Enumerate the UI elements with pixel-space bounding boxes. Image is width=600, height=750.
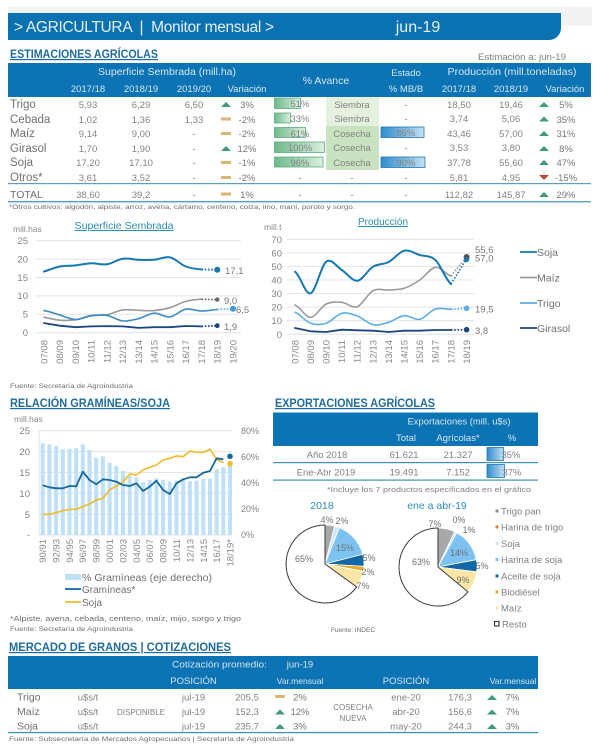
row: Maíz: 43,46	[447, 129, 471, 140]
pie chart: 2018: 4%	[320, 515, 334, 525]
chart: superficie sembrada: 1,9	[224, 322, 237, 333]
chart: relación gramíneas/soja: 60%	[241, 452, 259, 462]
chart: relación gramíneas/soja: 04/05	[132, 539, 143, 563]
table header: 2017/18	[71, 84, 105, 95]
row: Soja: Soja	[10, 157, 34, 169]
table: cotizaciones: u$s/t	[78, 722, 99, 732]
table: exportaciones: Año 2018	[307, 450, 347, 461]
header banner: jun-19	[395, 19, 440, 36]
chart: relación gramíneas/soja: 00/01	[105, 539, 116, 563]
header banner: > AGRICULTURA | Monitor mensual >	[14, 19, 274, 36]
legend: pie charts: Harina de trigo	[501, 522, 563, 534]
legend: producción	[520, 247, 570, 335]
table: estimaciones agrícolas	[8, 63, 591, 202]
chart: relación gramíneas/soja: 16/17	[212, 539, 223, 563]
table: cotizaciones: u$s/t	[78, 692, 99, 704]
table: cotizaciones: 205,5	[235, 692, 259, 704]
chart: producción: 18/19	[462, 340, 473, 364]
chart: relación gramíneas/soja: 96/97	[78, 539, 89, 563]
table: cotizaciones: Var.mensual	[277, 676, 323, 686]
row: Cebada: Siembra	[334, 114, 370, 125]
bars: % gramíneas	[41, 443, 232, 535]
table: cotizaciones: POSICIÓN	[383, 676, 429, 687]
table: cotizaciones: Maíz	[17, 706, 40, 718]
pie chart: 2018: 2%	[361, 567, 375, 577]
row: Cebada	[10, 113, 576, 126]
chart: relación gramíneas/soja: 40%	[241, 478, 259, 488]
table: exportaciones: 7.152	[446, 468, 470, 478]
chart: relación gramíneas/soja: 10	[19, 489, 30, 500]
table header: 2017/18	[442, 84, 476, 95]
legend: pie charts: Trigo pan	[501, 506, 541, 518]
row: Otros	[10, 172, 578, 184]
status background cells	[326, 97, 379, 170]
legend: pie charts: Aceite de soja	[501, 572, 561, 582]
pie chart: ene a abr-19: 1%	[462, 525, 476, 535]
chart: superficie sembrada: 15	[17, 273, 28, 284]
chart: producción: 20	[271, 302, 282, 314]
row: Soja: 37,78	[447, 158, 471, 169]
row: Girasol: 100%	[288, 143, 313, 154]
line: soja	[43, 449, 223, 514]
chart: superficie sembrada: 08/09	[55, 340, 66, 364]
row: Cebada: 3,74	[450, 114, 468, 125]
row: Otros: -	[404, 173, 408, 184]
chart: relación gramíneas/soja: 10/11	[172, 539, 183, 562]
table: exportaciones: 19.491	[389, 468, 419, 478]
row: Trigo: Trigo	[10, 99, 36, 111]
row: Soja: Cosecha	[333, 158, 371, 169]
chart: superficie sembrada: 17/18	[197, 340, 208, 364]
row: Cebada: 35%	[556, 115, 576, 126]
row: Soja: 17,10	[129, 158, 153, 169]
row: Maíz: 61%	[290, 129, 310, 140]
row: Trigo: 5,93	[79, 100, 97, 111]
table: cotizaciones: 2%	[293, 692, 307, 704]
row: Otros: -	[350, 173, 354, 184]
table: exportaciones: 21.327	[443, 450, 473, 461]
heading: exportaciones agrícolas: EXPORTACIONES AGRÍCOLAS	[275, 395, 435, 410]
chart: superficie sembrada: 19/20	[228, 340, 239, 364]
table: cotizaciones: jul-19	[181, 692, 205, 704]
row: TOTAL: 29%	[556, 190, 576, 201]
footnote: otros cultivos: *Otros cultivos: algodón, alpiste, arroz, avena, cártamo, centeno, colza, lino, maní, poroto y sorgo.	[9, 204, 355, 211]
chart: relación gramíneas/soja: 25	[19, 426, 30, 437]
row: Maíz: 57,00	[499, 129, 523, 140]
table header: 2019/20	[177, 84, 211, 95]
heading: estimaciones agrícolas: ESTIMACIONES AGRÍCOLAS	[10, 46, 158, 61]
chart: producción: 55,6	[475, 245, 494, 256]
pie chart: 2018: 15%	[336, 543, 354, 553]
heading: mercado de granos: MERCADO DE GRANOS | COTIZACIONES	[9, 640, 231, 654]
chart: producción: 40	[271, 276, 282, 286]
legend: pie charts: Maíz	[501, 604, 522, 614]
note: exportaciones: *Incluye los 7 productos especificados en el gráfico	[327, 485, 531, 494]
table: cotizaciones: 7%	[506, 692, 520, 704]
chart: relación gramíneas/soja: 02/03	[118, 539, 129, 563]
row: Trigo: Siembra	[334, 100, 370, 111]
row: Cebada: 1,36	[132, 115, 150, 126]
table header: % Avance	[303, 75, 349, 87]
chart: superficie sembrada: 12/13	[118, 340, 129, 364]
row: Girasol	[10, 142, 573, 155]
chart: relación gramíneas/soja: 08/09	[159, 539, 170, 563]
row: Otros: 3,52	[132, 173, 150, 184]
table header: Variación	[228, 84, 266, 95]
chart: relación gramíneas/soja: 14/15	[199, 539, 210, 563]
chart: superficie sembrada: 18/19	[212, 340, 224, 364]
table: cotizaciones: jun-19	[286, 660, 313, 670]
chart: producción: 19,5	[475, 304, 494, 316]
chart: superficie sembrada	[13, 221, 249, 364]
row: Girasol: Cosecha	[333, 143, 371, 154]
row: Maíz	[10, 127, 576, 140]
row: Trigo: 6,50	[185, 100, 203, 111]
table: exportaciones: 35%	[501, 450, 521, 461]
pie chart: 2018: 2018	[310, 500, 334, 512]
table header	[8, 63, 591, 97]
row: Otros: -15%	[555, 173, 578, 184]
table header: Variación	[546, 84, 584, 95]
table: cotizaciones: jul-19	[181, 707, 205, 718]
table: cotizaciones: 235,7	[235, 722, 259, 732]
row: Girasol: 3,80	[502, 143, 520, 154]
pie chart: 2018: 7%	[356, 581, 370, 591]
table: cotizaciones: NUEVA	[340, 714, 367, 723]
chart: producción: 09/10	[322, 340, 332, 364]
chart: superficie sembrada: 07/08	[39, 340, 50, 364]
legend: pie charts: Resto	[502, 620, 527, 630]
table: cotizaciones: jul-19	[181, 722, 205, 732]
table: cotizaciones: Soja	[17, 720, 38, 732]
row: Cebada: 33%	[290, 114, 310, 125]
chart: producción: 13/14	[384, 340, 395, 364]
chart: producción	[264, 217, 494, 364]
row: Maíz: Cosecha	[333, 129, 371, 140]
header banner	[8, 7, 592, 40]
chart: superficie sembrada: 09/10	[71, 340, 82, 364]
source: gramíneas: Fuente: Secretaría de Agroindustria	[10, 626, 133, 633]
row: Trigo: 18,50	[447, 100, 471, 111]
legend: pie charts	[494, 506, 563, 630]
chart: superficie sembrada: 10/11	[86, 340, 98, 363]
pie chart: ene a abr-19: 5%	[475, 561, 489, 571]
pie chart: 2018: 2%	[335, 516, 349, 526]
chart: relación gramíneas/soja: 5	[25, 510, 30, 521]
chart: relación gramíneas/soja: mill.has	[14, 414, 43, 424]
chart: producción: 10	[271, 316, 282, 327]
row: Girasol: Girasol	[10, 143, 46, 155]
row: Maíz: 9,00	[132, 129, 150, 140]
row: TOTAL: -	[404, 190, 408, 201]
row: Maíz: -	[192, 129, 196, 140]
table: cotizaciones: DISPONIBLE	[117, 708, 165, 717]
row: Trigo: 3%	[240, 100, 254, 111]
row: TOTAL: 112,82	[445, 190, 473, 201]
footnote: gramíneas: *Alpiste, avena, cebada, centeno, maíz, mijo, sorgo y trigo	[10, 614, 241, 623]
chart: relación gramíneas/soja: 12/13	[185, 539, 196, 563]
row: Trigo: 6,29	[132, 100, 150, 111]
row: Otros: -2%	[239, 173, 256, 184]
row: Girasol: 12%	[237, 144, 257, 155]
row: Girasol: 1,90	[132, 144, 150, 155]
row: TOTAL: 38,60	[76, 190, 100, 201]
line: gramíneas	[43, 458, 223, 494]
table: exportaciones: Agrícolas*	[436, 433, 480, 444]
table: cotizaciones	[8, 656, 538, 733]
pie chart: 2018	[286, 500, 376, 603]
table: cotizaciones: 156,6	[448, 707, 472, 718]
chart: relación gramíneas/soja: 18/19*	[226, 539, 237, 566]
legend: relación gramíneas/soja: Gramíneas*	[82, 585, 135, 596]
chart: relación gramíneas/soja: 90/91	[38, 539, 49, 563]
chart: relación gramíneas/soja: 98/99	[92, 539, 103, 563]
chart: superficie sembrada: 9,0	[224, 296, 237, 307]
legend: producción: Maíz	[537, 272, 560, 284]
row: Soja: 90%	[396, 158, 416, 169]
legend: producción: Trigo	[537, 298, 561, 310]
chart: superficie sembrada: 15/16	[165, 340, 176, 364]
row: Soja: -	[192, 158, 196, 169]
chart: relación gramíneas/soja: -	[27, 530, 30, 541]
pie chart: ene a abr-19: 7%	[428, 519, 442, 529]
legend: pie charts: Harina de soja	[501, 555, 563, 566]
table: cotizaciones: COSECHA	[333, 703, 373, 712]
legend: producción: Soja	[537, 247, 558, 259]
row: Cebada: 5,06	[502, 114, 520, 125]
chart: producción: 30	[271, 289, 282, 300]
chart: relación gramíneas/soja: 15	[19, 468, 30, 479]
row: Otros: 5,81	[450, 173, 468, 184]
row: Soja: 96%	[290, 158, 310, 169]
table header: Superficie Sembrada (mill.ha)	[98, 66, 236, 78]
pie chart: ene a abr-19: 14%	[450, 548, 468, 558]
legend: relación gramíneas/soja	[65, 573, 212, 609]
row: Otros: -	[298, 173, 302, 184]
pie chart: ene a abr-19: 0%	[452, 515, 466, 525]
chart: superficie sembrada: 17,1	[225, 266, 244, 277]
table: exportaciones: 61.621	[389, 450, 419, 461]
chart: relación gramíneas/soja	[14, 414, 259, 566]
chart: producción: 50	[271, 262, 282, 273]
chart: producción: 16/17	[431, 340, 442, 364]
row: Cebada: -2%	[239, 115, 256, 126]
table header: Producción (mill.toneladas)	[448, 66, 576, 78]
row: TOTAL: -	[350, 190, 354, 201]
chart: producción: 11/12	[353, 340, 364, 363]
legend: relación gramíneas/soja: % Gramíneas (eje derecho)	[82, 573, 212, 584]
row: Maíz: -2%	[239, 129, 256, 140]
chart: relación gramíneas/soja: 94/95	[65, 539, 76, 563]
row: Soja: 47%	[556, 158, 576, 169]
chart: superficie sembrada: 14/15	[150, 340, 160, 364]
table: cotizaciones: abr-20	[392, 707, 420, 718]
row: Girasol: 3,53	[450, 143, 468, 154]
chart: producción: 60	[271, 248, 282, 260]
pie chart: ene a abr-19: 63%	[412, 557, 430, 567]
chart: superficie sembrada: 13/14	[134, 340, 145, 364]
chart: producción: 15/16	[415, 340, 426, 364]
row: Maíz: 86%	[396, 128, 416, 139]
chart: producción: 10/11	[337, 340, 348, 363]
chart: superficie sembrada: 11/12	[102, 340, 113, 363]
row: Trigo: 5%	[559, 100, 573, 111]
table: exportaciones: %	[508, 433, 517, 444]
row: TOTAL: -	[192, 190, 196, 201]
chart: superficie sembrada: 10	[17, 291, 28, 302]
legend: producción: Girasol	[537, 323, 570, 335]
row: Girasol: 8%	[559, 144, 573, 155]
table: cotizaciones: may-20	[390, 722, 422, 732]
table: exportaciones	[273, 412, 538, 481]
chart: superficie sembrada: 16/17	[181, 340, 192, 364]
row: Maíz: 31%	[556, 129, 576, 140]
table: cotizaciones: 7%	[506, 707, 520, 718]
chart: superficie sembrada: 5	[23, 310, 28, 320]
row: Cebada: -	[404, 114, 408, 125]
table: cotizaciones: 12%	[290, 707, 310, 718]
estimation date: Estimación a: jun-19	[478, 52, 566, 63]
chart: producción: 17/18	[446, 340, 457, 364]
row: TOTAL: 39,2	[132, 190, 150, 201]
row: Trigo: -	[404, 100, 408, 111]
row: Otros: Otros*	[10, 172, 43, 184]
row: Trigo: 19,46	[499, 100, 523, 111]
table: cotizaciones: u$s/t	[78, 707, 99, 718]
table: cotizaciones: 152,3	[235, 707, 259, 718]
legend: pie charts: Biodiésel	[501, 588, 540, 598]
row: Otros: 3,61	[79, 173, 97, 184]
chart: producción: 57,0	[475, 254, 494, 264]
chart: producción: 0	[277, 330, 282, 341]
row: Soja	[10, 157, 576, 169]
chart: producción: 3,8	[475, 326, 488, 337]
chart: relación gramíneas/soja: 80%	[241, 426, 259, 436]
chart title: Producción	[358, 217, 408, 228]
chart: producción: 12/13	[368, 340, 379, 364]
chart: producción: mill.t	[264, 222, 282, 232]
row: Otros: 4,95	[502, 173, 520, 184]
chart: superficie sembrada: 25	[17, 236, 28, 247]
chart: producción: 70	[271, 235, 282, 246]
heading: relación gramíneas/soja: RELACIÓN GRAMÍNEAS/SOJA	[10, 395, 170, 410]
row: Trigo: 51%	[290, 99, 310, 110]
row: TOTAL: TOTAL	[10, 189, 43, 201]
pie chart: 2018: 65%	[295, 554, 313, 564]
pie chart: 2018: 5%	[362, 553, 376, 563]
chart: relación gramíneas/soja: 92/93	[51, 539, 62, 563]
row: Trigo	[10, 98, 573, 111]
chart: relación gramíneas/soja: 20	[19, 447, 30, 458]
chart: relación gramíneas/soja: 0%	[241, 530, 254, 540]
table: cotizaciones: 244,3	[448, 722, 472, 732]
source: INDEC: Fuente: INDEC	[331, 627, 375, 634]
row: Maíz: Maíz	[10, 128, 35, 140]
row: Cebada: 1,02	[79, 115, 97, 126]
row: Girasol: -	[404, 143, 408, 154]
table: exportaciones: Total	[396, 433, 416, 444]
table: cotizaciones: Cotización promedio:	[172, 660, 267, 670]
chart: producción: 14/15	[400, 340, 410, 364]
legend: relación gramíneas/soja: Soja	[82, 598, 102, 609]
row: Soja: -1%	[239, 158, 256, 169]
row: TOTAL: 145,87	[496, 190, 526, 201]
row: TOTAL: -	[298, 190, 302, 201]
pie chart: ene a abr-19: ene a abr-19	[407, 500, 467, 512]
row: Girasol: -	[192, 144, 196, 155]
pie chart: ene a abr-19	[399, 500, 489, 606]
table: cotizaciones: Var.mensual	[490, 676, 536, 686]
table header: % MB/B	[389, 84, 423, 95]
row: TOTAL	[10, 189, 576, 201]
table: cotizaciones: Trigo	[17, 692, 41, 704]
table: cotizaciones: ene-20	[391, 692, 421, 704]
table header: 2018/19	[124, 84, 158, 95]
chart: superficie sembrada: mill.has	[13, 224, 42, 234]
table header: Estado	[391, 68, 421, 79]
row: Cebada: Cebada	[10, 114, 51, 126]
chart title: Superficie Sembrada	[74, 221, 174, 232]
source: mercados: Fuente: Subsecretaría de Mercados Agropecuarios | Secretaría de Agroindustria	[9, 736, 294, 743]
chart: relación gramíneas/soja: 06/07	[145, 539, 156, 563]
table: exportaciones: 37%	[502, 468, 522, 478]
row: Soja: 55,60	[499, 158, 523, 169]
row: Maíz: 9,14	[79, 129, 97, 140]
source: superficie: Fuente: Secretaría de Agroindustria	[10, 383, 133, 390]
pie chart: ene a abr-19: 9%	[456, 575, 470, 585]
chart: relación gramíneas/soja: 20%	[241, 504, 259, 514]
row: Cebada: 1,33	[185, 115, 203, 126]
table: cotizaciones: 3%	[506, 722, 520, 732]
chart: producción: 08/09	[306, 340, 317, 364]
table: exportaciones: Ene-Abr 2019	[297, 468, 355, 478]
chart: superficie sembrada: 0	[23, 328, 28, 339]
legend: pie charts: Soja	[501, 539, 521, 550]
row: Otros: -	[192, 173, 196, 184]
row: Girasol: 1,70	[79, 144, 97, 155]
table: cotizaciones: 176,3	[448, 692, 472, 704]
chart: producción: 07/08	[290, 340, 301, 364]
chart: superficie sembrada: 6,5	[236, 305, 249, 316]
chart: superficie sembrada: 20	[17, 254, 28, 266]
table: exportaciones: Exportaciones (mill. u$s)	[408, 416, 510, 428]
row: TOTAL: 1%	[240, 190, 254, 201]
table: cotizaciones: POSICIÓN	[170, 676, 217, 687]
table header: 2018/19	[494, 84, 528, 95]
row: Soja: 17,20	[76, 158, 100, 169]
table: cotizaciones: 3%	[293, 722, 307, 732]
